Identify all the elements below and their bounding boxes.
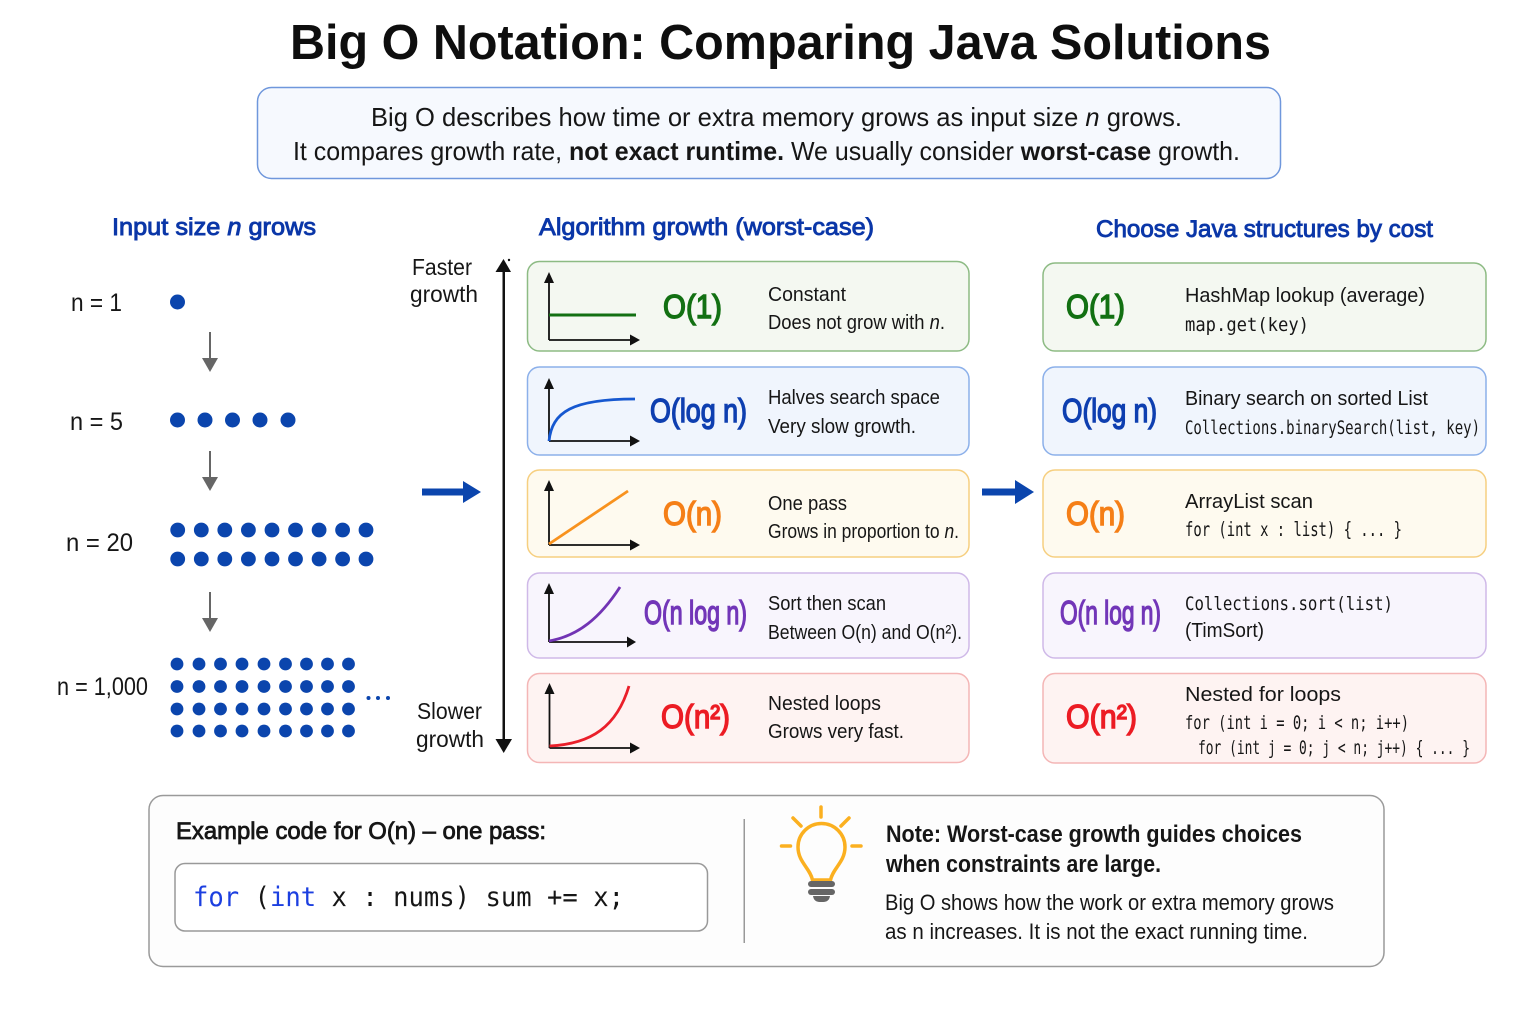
note body	[885, 890, 1334, 944]
panel: java structures	[1043, 216, 1486, 763]
panel: algorithm growth	[528, 214, 969, 762]
card: HashMap: map.get(key)	[1185, 314, 1309, 336]
card: O(n): O(n)	[663, 495, 722, 532]
code box	[175, 864, 708, 931]
chart: linearithmic	[544, 583, 636, 648]
growth-speed axis	[410, 254, 512, 753]
card: binary search	[1043, 367, 1486, 455]
growth-speed axis: Faster	[412, 254, 472, 280]
card: HashMap: O(1)	[1066, 288, 1125, 325]
icon: light bulb	[782, 807, 861, 902]
code box: for (int x : nums) sum += x;	[193, 882, 624, 913]
n = 1 row: n = 1	[71, 289, 122, 317]
chart: logarithmic	[544, 378, 640, 446]
panel: input size	[57, 214, 390, 737]
card: O(1) constant	[528, 262, 969, 351]
note heading: when constraints are large.	[885, 851, 1161, 878]
card: ArrayList: O(n)	[1066, 495, 1125, 532]
card: ArrayList: ArrayList scan	[1185, 491, 1313, 513]
arrow: 20 to 1000	[202, 592, 218, 632]
growth-speed axis: growth	[410, 281, 478, 307]
card: O(n log n)	[528, 573, 969, 658]
card: nested for loops: O(n²)	[1066, 698, 1137, 735]
intro callout	[258, 88, 1280, 178]
card: ArrayList	[1043, 470, 1486, 557]
note heading	[885, 821, 1302, 878]
heading: input size grows: Input size n grows	[112, 214, 316, 241]
arrow: input to growth	[422, 481, 481, 503]
card: Collections.sort: Collections.sort(list)	[1185, 593, 1393, 615]
chart: constant	[544, 272, 640, 346]
intro callout: Big O describes how time or extra memory grows as input size n grows.	[371, 102, 1182, 132]
n = 1,000 row: n = 1,000	[57, 673, 148, 701]
card: O(log n): O(log n)	[650, 392, 747, 429]
title: Big O Notation: Comparing Java Solutions	[290, 16, 1271, 70]
growth-speed axis: growth	[416, 726, 484, 752]
card: ArrayList: for (int x : list) { ... }	[1185, 518, 1402, 541]
heading: example code: Example code for O(n) – one pass:	[176, 818, 546, 845]
n = 1,000 row	[57, 658, 390, 737]
card: binary search: O(log n)	[1062, 392, 1157, 429]
card: O(1) constant: O(1)	[663, 288, 722, 325]
card: nested for loops	[1043, 674, 1486, 763]
card: nested for loops: for (int i = 0; i < n; i++)	[1185, 712, 1409, 734]
note heading: Note: Worst-case growth guides choices	[886, 821, 1302, 848]
card: O(n log n): O(n log n)	[644, 594, 747, 631]
card: Collections.sort: O(n log n)	[1060, 594, 1161, 631]
card: O(n): One pass	[768, 493, 847, 515]
chart: linear	[544, 480, 640, 550]
card: Collections.sort	[1043, 573, 1486, 658]
n = 5 row: n = 5	[70, 408, 123, 436]
n = 20 row: n = 20	[66, 529, 133, 557]
card: binary search: Binary search on sorted List	[1185, 388, 1428, 410]
card: HashMap	[1043, 263, 1486, 351]
card: O(log n): Halves search space	[768, 387, 940, 409]
card: HashMap: HashMap lookup (average)	[1185, 285, 1425, 307]
panel: bottom example and note	[149, 796, 1384, 966]
heading: algorithm growth: Algorithm growth (worst-case)	[539, 214, 874, 241]
card: O(n)	[528, 470, 969, 557]
note body: Big O shows how the work or extra memory grows	[885, 890, 1334, 915]
card: O(log n): Very slow growth.	[768, 416, 916, 438]
chart: quadratic	[544, 683, 640, 754]
arrow: 5 to 20	[202, 451, 218, 491]
arrow: growth to structures	[982, 480, 1034, 504]
card: O(1) constant: Does not grow with n.	[768, 312, 945, 334]
n = 1 row	[71, 289, 185, 317]
note body: as n increases. It is not the exact running time.	[885, 919, 1308, 944]
card: O(n log n): Between O(n) and O(n²).	[768, 622, 962, 644]
n = 5 row	[70, 408, 296, 436]
card: O(n squared): O(n²)	[661, 698, 730, 735]
card: O(n squared): Grows very fast.	[768, 721, 904, 743]
card: Collections.sort: (TimSort)	[1185, 620, 1264, 642]
card: O(n log n): Sort then scan	[768, 593, 886, 615]
heading: java structures: Choose Java structures by cost	[1096, 216, 1433, 243]
arrow: 1 to 5	[202, 332, 218, 372]
n = 20 row	[66, 523, 373, 566]
card: nested for loops: Nested for loops	[1185, 684, 1341, 706]
card: O(log n)	[528, 367, 969, 455]
growth-speed axis: Slower	[417, 698, 482, 724]
card: O(1) constant: Constant	[768, 284, 846, 306]
card: O(n): Grows in proportion to n.	[768, 521, 959, 543]
intro callout: It compares growth rate, not exact runtime. We usually consider worst-case growth.	[293, 136, 1240, 166]
card: O(n squared)	[528, 674, 969, 762]
card: O(n squared): Nested loops	[768, 693, 881, 715]
